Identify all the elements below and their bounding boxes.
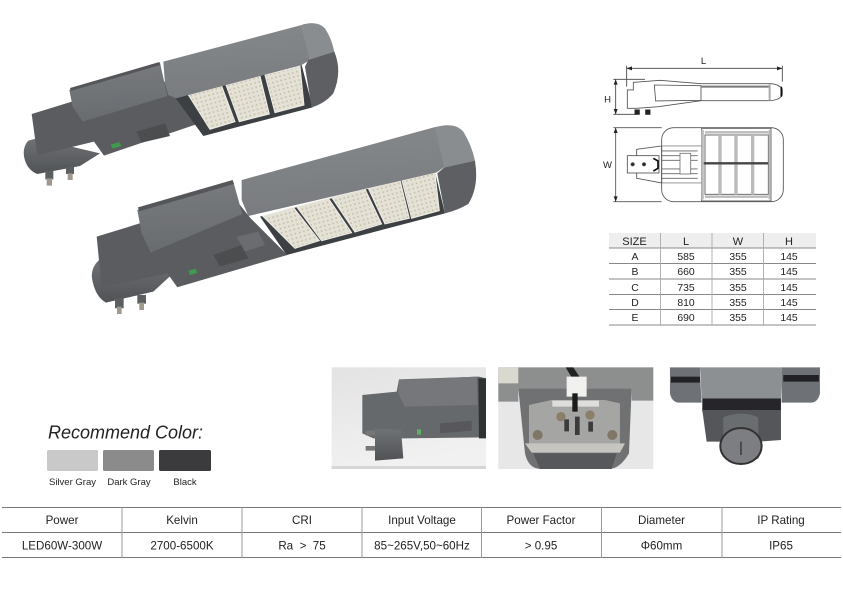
size table rows: 145: [780, 298, 798, 309]
specification value row: Ra > 75: [278, 540, 326, 552]
size table header: L: [683, 236, 689, 248]
size table rows: B: [632, 267, 639, 278]
size table rows: A: [632, 252, 639, 263]
size table rows: 355: [729, 252, 747, 263]
size table rows: 810: [677, 298, 695, 309]
recommend color heading: Recommend Color:: [48, 422, 203, 442]
end cap: [435, 125, 475, 167]
color swatch: dark gray: [103, 450, 154, 488]
specification value row: Φ60mm: [641, 540, 682, 552]
top view: [613, 128, 783, 202]
specification value row: LED60W-300W: [22, 540, 102, 552]
size table header: H: [785, 236, 793, 248]
specification header row: CRI: [292, 514, 312, 527]
dimension labels: [603, 56, 706, 171]
specification header row: [46, 514, 805, 527]
size table header: SIZE: [622, 236, 647, 248]
color swatch: dark gray: Dark Gray: [107, 477, 151, 488]
lower housing: [97, 197, 287, 287]
specification value row: 2700-6500K: [150, 540, 214, 552]
size table rows: E: [632, 313, 639, 324]
driver box: [137, 182, 242, 253]
color swatch: silver gray: Silver Gray: [49, 477, 96, 488]
mounting pipe and bolts: [92, 258, 173, 314]
specification header row: Input Voltage: [388, 514, 456, 527]
lower housing: [32, 77, 197, 156]
specification header row: Kelvin: [166, 514, 198, 527]
side view: [613, 66, 782, 114]
specification header row: Power Factor: [507, 514, 576, 527]
dimension labels: W: [603, 160, 612, 171]
driver box: [69, 63, 167, 122]
end cap: [302, 23, 334, 60]
dimension drawing: [613, 66, 783, 202]
dimension labels: L: [701, 56, 706, 67]
size table rows: 355: [729, 283, 747, 294]
heat-sink arm: [242, 127, 445, 216]
size table rows: D: [631, 298, 639, 309]
size table rows: 585: [677, 252, 695, 263]
LED modules: [263, 173, 439, 248]
size table rows: 145: [780, 313, 798, 324]
size table rows: 735: [677, 283, 695, 294]
size table rows: 355: [729, 313, 747, 324]
specification header row: Power: [46, 514, 79, 527]
dark LED frame: [260, 172, 445, 255]
color swatch: silver gray: [47, 450, 98, 488]
dark LED frame: [175, 65, 313, 136]
detail photo: housing side: [332, 367, 486, 469]
size table rows: 660: [677, 267, 695, 278]
size table header: [609, 233, 816, 248]
detail photo: pipe end view: [670, 367, 820, 464]
color swatch: black: [159, 450, 211, 488]
size table rows: 690: [677, 313, 695, 324]
specification value row: IP65: [769, 540, 793, 552]
specification table: [2, 507, 841, 558]
size table rows: [631, 252, 798, 324]
specification value row: > 0.95: [525, 540, 557, 552]
size table: [609, 233, 816, 325]
specification value row: [22, 540, 793, 552]
size table rows: 145: [780, 252, 798, 263]
size table rows: 145: [780, 267, 798, 278]
product photo: three-module street light: [24, 23, 338, 186]
size table rows: 145: [780, 283, 798, 294]
dimension labels: H: [604, 94, 611, 106]
detail photo: terminal block: [498, 367, 653, 469]
LED modules: [188, 66, 304, 129]
product photo: five-module street light: [92, 125, 476, 314]
specification header row: IP Rating: [757, 514, 805, 527]
size table header: W: [733, 236, 744, 248]
color swatch: black: Black: [173, 477, 197, 488]
size table rows: 355: [729, 267, 747, 278]
heat-sink arm: [163, 25, 310, 98]
size table rows: C: [631, 283, 639, 294]
specification value row: 85~265V,50~60Hz: [374, 540, 470, 552]
specification header row: Diameter: [638, 514, 685, 527]
size table rows: 355: [729, 298, 747, 309]
mounting pipe and bolts: [24, 138, 100, 186]
